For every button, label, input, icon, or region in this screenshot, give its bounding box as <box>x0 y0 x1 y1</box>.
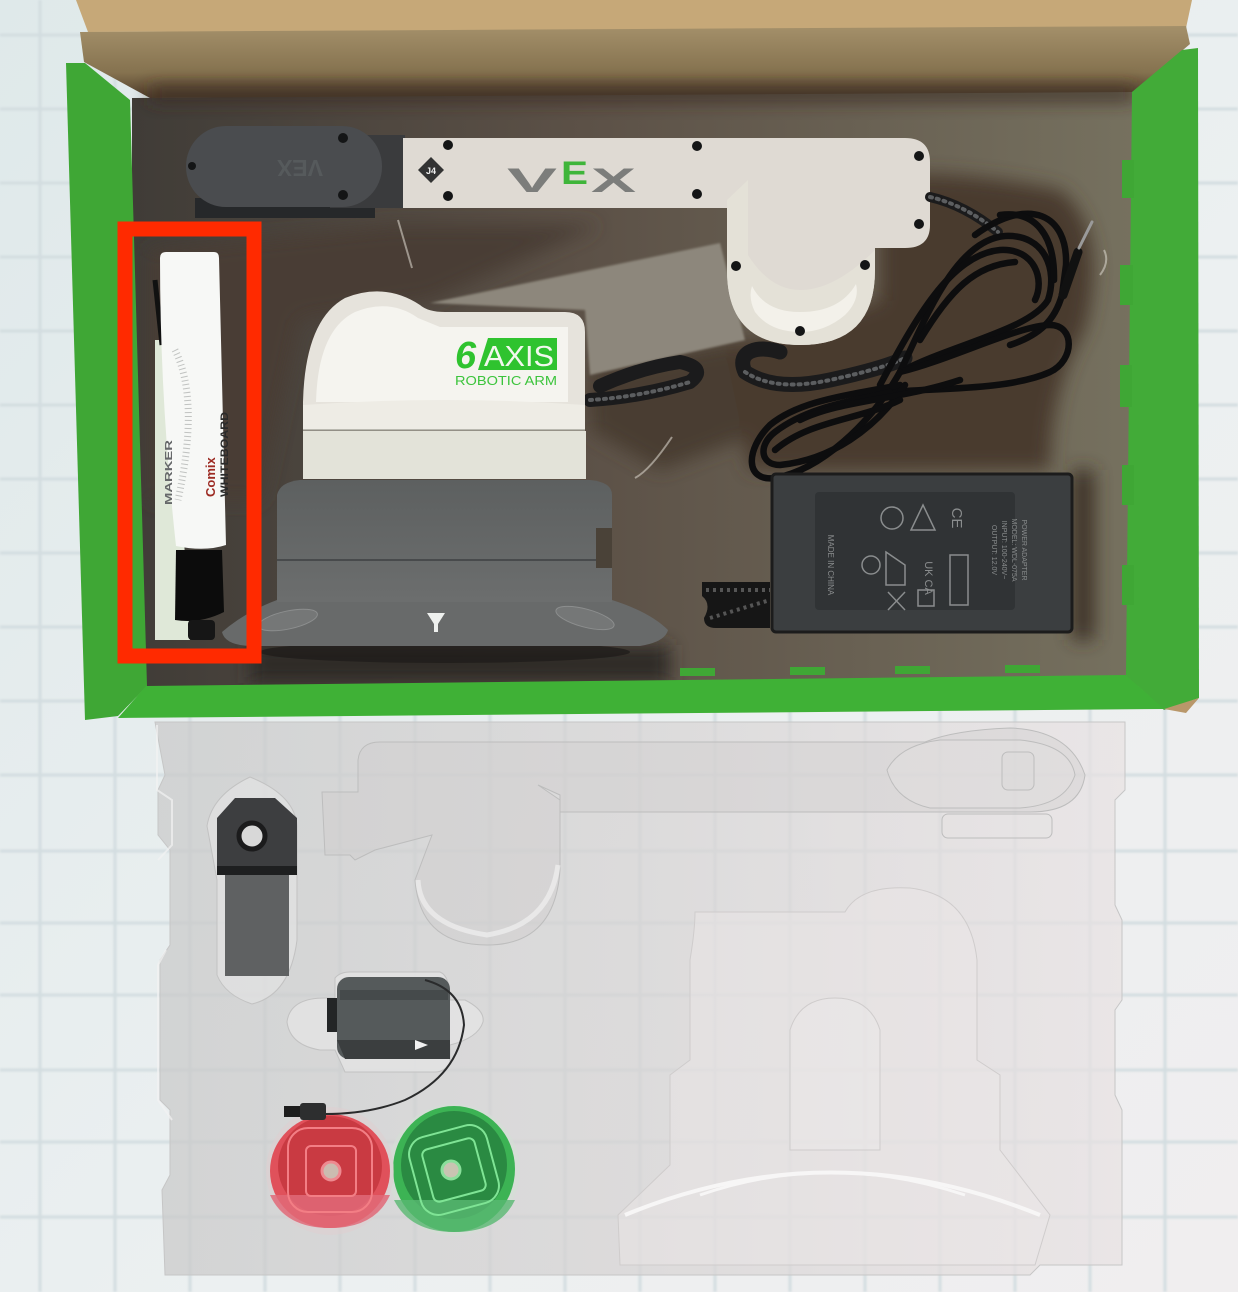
red highlight box <box>125 229 254 656</box>
green front wall <box>118 675 1164 718</box>
diamond joint mark <box>418 157 444 183</box>
adapter label <box>815 492 1015 610</box>
VEX logo: X <box>591 162 637 200</box>
arm white body <box>403 138 930 345</box>
DC plug <box>1063 252 1078 295</box>
tray lighter slope <box>430 243 745 375</box>
power adapter: OUTPUT: 12.0V <box>990 525 997 575</box>
braided and power cables <box>590 197 1092 478</box>
bracket part <box>207 777 297 1004</box>
power adapter <box>702 474 1072 632</box>
VEX logo <box>507 155 637 200</box>
grey base cylinder <box>277 480 612 602</box>
green left wall <box>66 63 147 720</box>
robot arm upper link <box>186 126 930 345</box>
tray light highlights <box>398 220 1106 478</box>
base icon <box>427 613 445 632</box>
spare card behind marker <box>155 340 190 640</box>
robot arm upper link: VEX <box>276 155 323 181</box>
whiteboard marker: MARKER <box>164 439 175 505</box>
inner cardboard wall <box>80 26 1190 98</box>
VEX logo: E <box>561 155 588 191</box>
power adapter: INPUT: 100-240V~ <box>1000 521 1007 579</box>
marker barrel <box>160 252 226 549</box>
6 AXIS logo: AXIS <box>484 341 554 373</box>
robot arm base <box>222 291 668 663</box>
6 AXIS logo: ROBOTIC ARM <box>455 373 557 388</box>
gripper motor part <box>287 972 483 1072</box>
insert outline <box>155 722 1125 1275</box>
marker cap <box>175 550 224 621</box>
braided cable <box>590 197 998 400</box>
marker brand text: Comix <box>203 456 218 497</box>
robot arm upper link: J4 <box>426 166 436 176</box>
power adapter: MODEL: WDL-075A <box>1010 518 1017 582</box>
panel: open box <box>66 0 1199 720</box>
green button part <box>388 1104 520 1236</box>
base shadow <box>260 641 630 663</box>
base mounting slots <box>257 605 319 635</box>
base flange <box>222 600 668 646</box>
base recess <box>618 888 1050 1265</box>
VEX logo: V <box>507 162 558 200</box>
plastic tray in box <box>132 92 1138 688</box>
green right wall <box>1126 48 1199 710</box>
power adapter: POWER ADAPTER <box>1020 519 1027 581</box>
green tabs on tray edge <box>680 160 1134 676</box>
motor wire and connector <box>284 980 464 1120</box>
panel: removed clear insert <box>155 722 1125 1275</box>
6 AXIS logo <box>455 335 557 388</box>
arm recess <box>322 728 1085 945</box>
power adapter: MADE IN CHINA <box>826 535 835 596</box>
whiteboard marker <box>155 252 231 640</box>
red button part <box>266 1107 394 1235</box>
6 AXIS logo: 6 <box>455 335 477 377</box>
arm grey end cap <box>195 198 375 218</box>
power adapter: CE <box>948 508 965 528</box>
cardboard lid flap <box>76 0 1192 32</box>
power adapter: UK CA <box>922 561 934 595</box>
cardboard corner below box <box>1164 698 1199 713</box>
whiteboard marker: WHITEBOARD <box>219 412 231 497</box>
power cord loops <box>752 214 1069 478</box>
white shoulder dome <box>303 291 585 420</box>
